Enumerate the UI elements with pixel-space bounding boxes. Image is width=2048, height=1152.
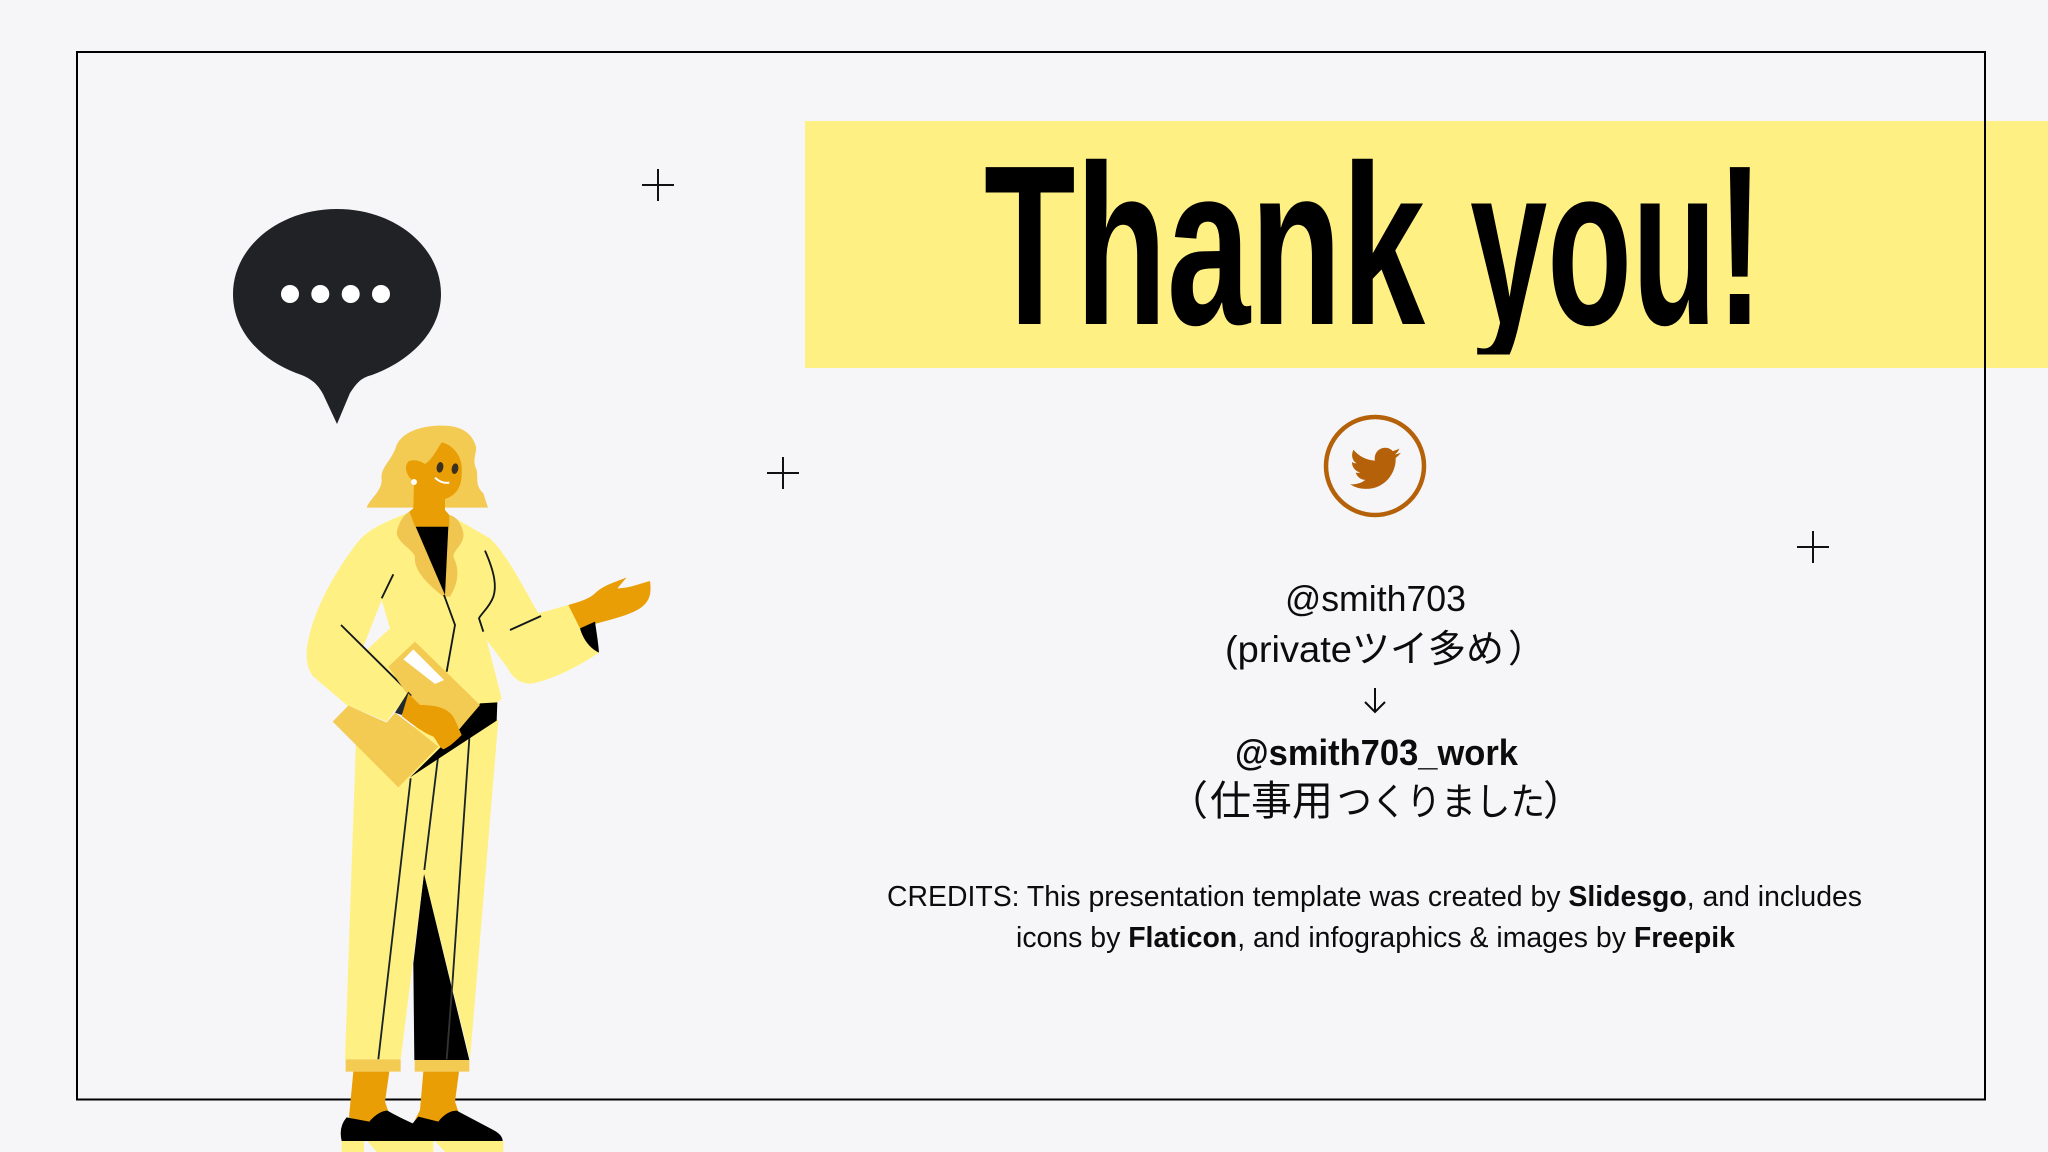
- dark cuff: [395, 692, 412, 715]
- bird: [1350, 448, 1401, 489]
- trouser creases: [378, 738, 469, 1059]
- shirt: [416, 527, 448, 595]
- lower body: [341, 720, 503, 1152]
- hair: [367, 426, 488, 508]
- personal handle: @smith703: [1285, 578, 1466, 619]
- work note: 仕事用: [1210, 778, 1333, 824]
- private note: ）: [1508, 629, 1546, 671]
- work note: （: [1167, 778, 1208, 824]
- right cuff lining: [580, 622, 599, 653]
- title: you!: [1470, 119, 1763, 373]
- icon: twitter: [1326, 417, 1424, 515]
- eyes: [436, 461, 459, 474]
- clipboard back: [410, 702, 497, 777]
- work note: つくりました: [1337, 782, 1545, 824]
- folder and hand: [333, 642, 497, 787]
- credits line 2: icons by Flaticon, and infographics & images by Freepik: [1016, 922, 1736, 954]
- title banner: [805, 121, 2048, 368]
- private note: (private: [1225, 629, 1352, 670]
- title: [986, 158, 1750, 354]
- work note: [1167, 778, 1584, 824]
- folder upper: [388, 642, 480, 728]
- right hand: [568, 577, 651, 628]
- icon ring: [1326, 417, 1424, 515]
- bubble dots: [281, 285, 390, 303]
- icon: speech bubble: [233, 209, 441, 424]
- left hand: [402, 693, 462, 749]
- work note: ）: [1543, 778, 1584, 824]
- right trouser leg: [424, 720, 498, 1059]
- paper: [403, 649, 444, 684]
- jacket seam lines: [341, 551, 541, 692]
- private note: ツイ多め: [1352, 629, 1504, 671]
- shoes: [341, 1111, 503, 1141]
- left trouser leg: [345, 720, 447, 1059]
- smile: [435, 478, 449, 483]
- illustration: woman in yellow suit: [307, 426, 651, 1152]
- bubble shape: [233, 209, 441, 424]
- arrow: [1365, 688, 1385, 712]
- right sleeve: [449, 515, 599, 684]
- plus decorations: [642, 169, 1829, 563]
- work handle: @smith703_work: [1235, 732, 1519, 773]
- folder lower: [333, 706, 438, 787]
- credits: [887, 881, 1862, 954]
- credits line 1: CREDITS: This presentation template was created by Slidesgo, and includes: [887, 881, 1862, 913]
- ankles: [349, 1072, 459, 1123]
- back leg: [413, 873, 469, 1060]
- jacket torso: [367, 512, 502, 737]
- ground strip under shoes: [342, 1141, 503, 1152]
- upper body: [307, 426, 651, 737]
- collar: [397, 512, 463, 597]
- trouser cuffs: [346, 1059, 469, 1072]
- left sleeve: [307, 513, 413, 722]
- private note: [1225, 629, 1546, 671]
- earring: [411, 479, 417, 485]
- title: Thank: [984, 119, 1426, 373]
- neck and face: [406, 442, 462, 527]
- handles text block: [1167, 578, 1584, 824]
